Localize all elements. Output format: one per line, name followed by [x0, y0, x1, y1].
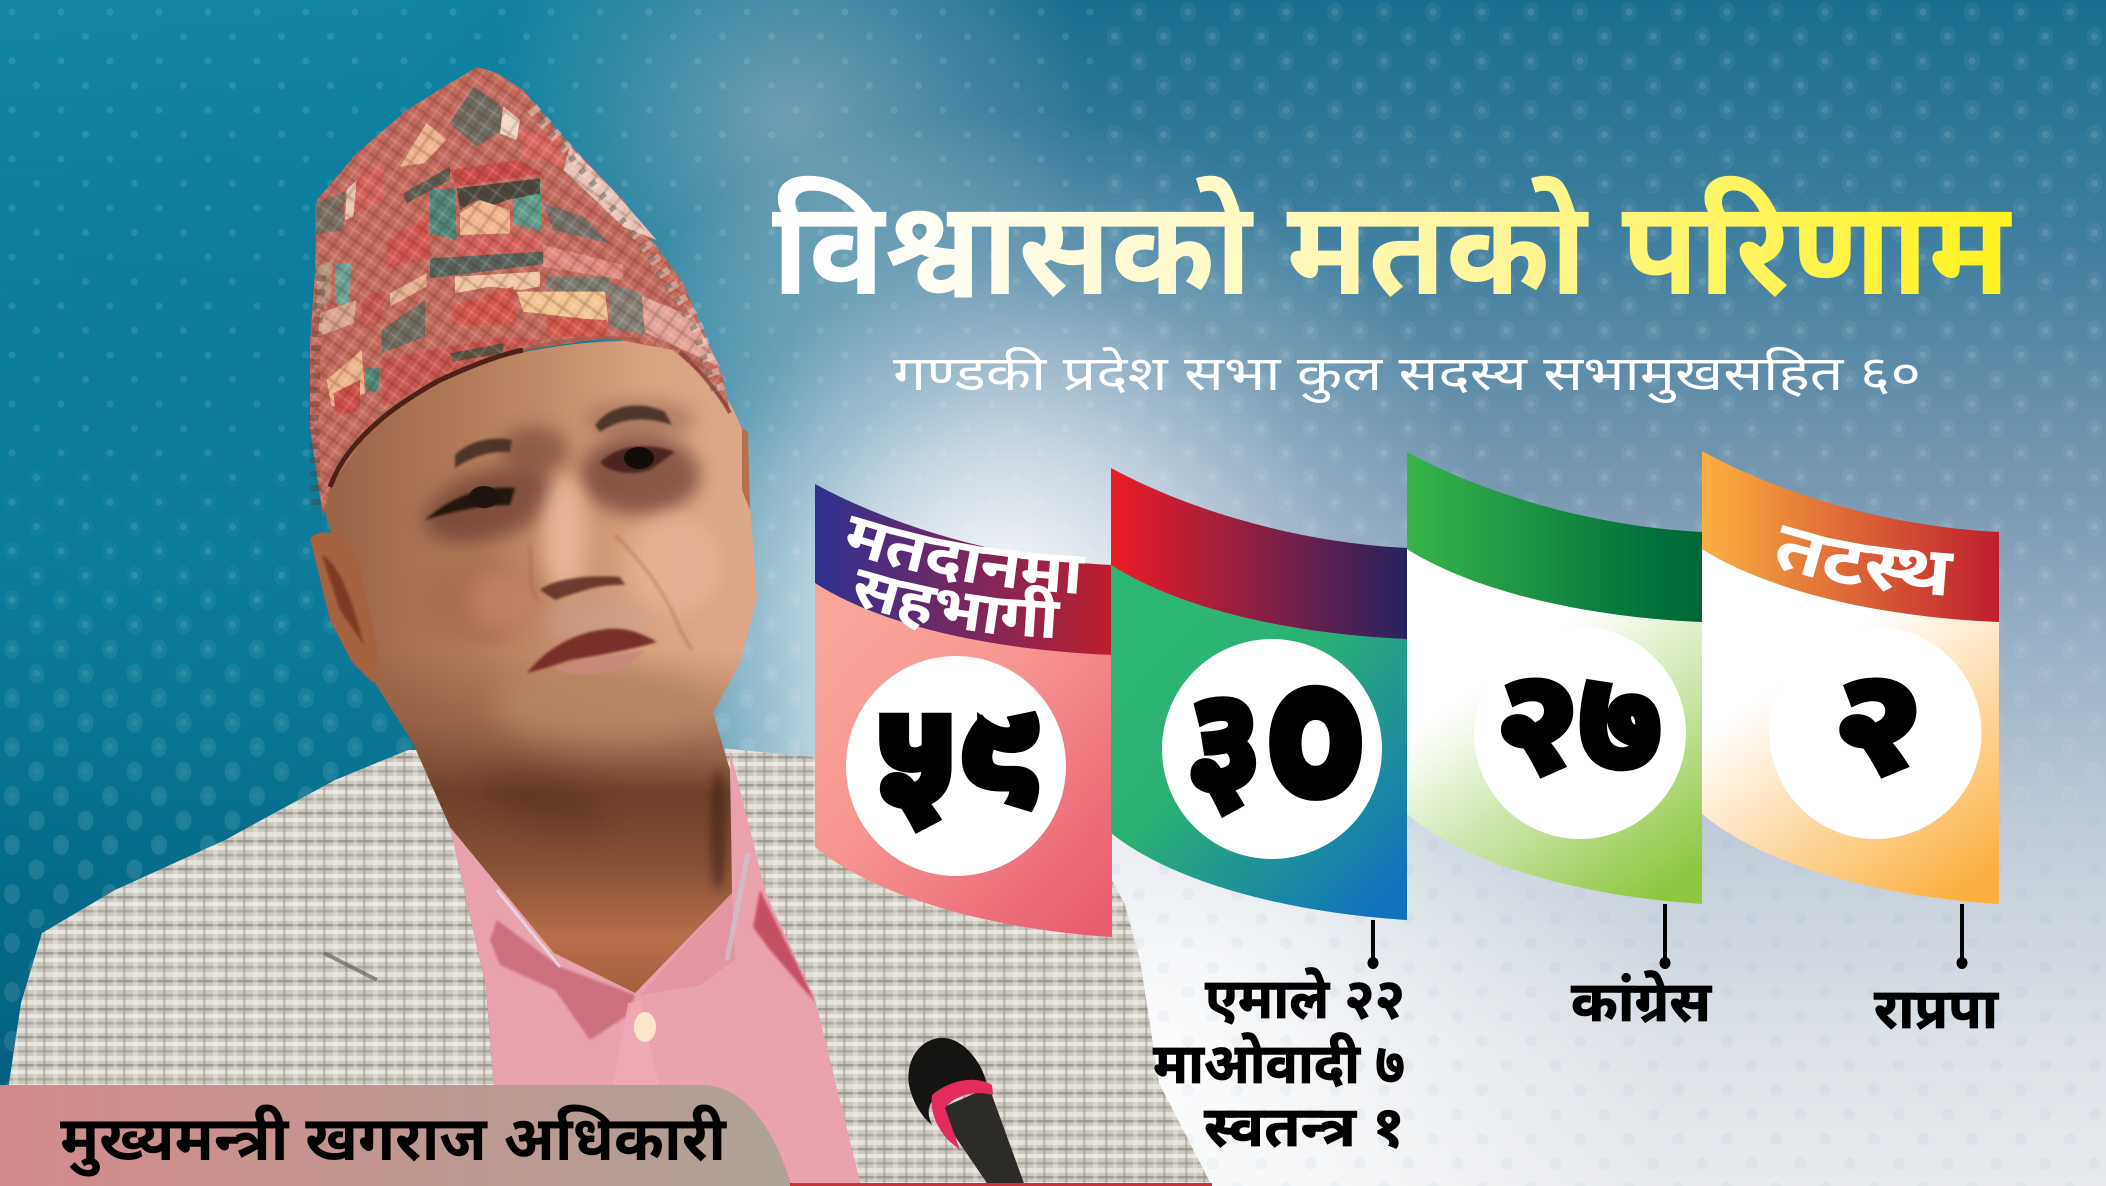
number 30	[1186, 596, 1370, 877]
number 27: २७	[1496, 643, 1661, 800]
caption: chief minister name	[0, 1085, 792, 1186]
pole	[1956, 904, 1968, 969]
lapel shadow	[324, 953, 377, 980]
eyebrows	[455, 439, 512, 468]
head and neck	[323, 341, 757, 993]
bottom red strip	[790, 1183, 1212, 1186]
ear	[310, 532, 378, 683]
label: rpp: राप्रपा	[1874, 977, 1999, 1040]
chin highlight	[495, 667, 705, 743]
hat	[310, 67, 730, 517]
label: neutral: तटस्थ	[1777, 525, 1954, 596]
number 30: ०	[1262, 596, 1370, 877]
number 2: २	[1834, 643, 1922, 800]
pole	[1660, 904, 1670, 969]
panel: flag participating	[815, 484, 1112, 937]
neck dark	[476, 762, 726, 890]
microphone	[908, 1038, 1025, 1186]
caption: chief minister name: मुख्यमन्त्री खगराज अधिकारी	[60, 1104, 728, 1177]
label: party breakdown	[1153, 967, 1405, 1158]
number 59: ५९	[874, 675, 1041, 840]
collar shadows	[490, 853, 816, 1090]
shirt button	[634, 1012, 656, 1042]
maoist: माओवादी ७	[1153, 1032, 1405, 1095]
subheading: गण्डकी प्रदेश सभा कुल सदस्य सभामुखसहित ६०	[893, 346, 1921, 404]
jacket right	[720, 748, 1212, 1186]
facial shading	[415, 400, 723, 645]
eyes	[425, 488, 515, 520]
panel: flag neutral	[1702, 451, 1999, 969]
nose	[540, 576, 625, 600]
panel: flag against	[1407, 452, 1702, 969]
hat rim stitching	[314, 108, 730, 505]
panel: flag in favour	[1111, 468, 1407, 969]
mouth	[527, 629, 657, 673]
pole	[1368, 920, 1378, 969]
portrait: chief minister	[8, 67, 1212, 1186]
label: flag 1 line 1: मतदानमा	[847, 516, 1086, 594]
jacket left	[8, 750, 494, 1090]
independent: स्वतन्त्र १	[1204, 1095, 1405, 1158]
number 30: ३	[1186, 659, 1262, 827]
uml: एमाले २२	[1205, 967, 1405, 1030]
shirt	[450, 750, 861, 1186]
heading: title: विश्वासको मतको परिणाम	[772, 175, 2012, 322]
label: flag 1 line 2: सहभागी	[856, 568, 1061, 638]
label: congress: कांग्रेस	[1571, 970, 1713, 1033]
